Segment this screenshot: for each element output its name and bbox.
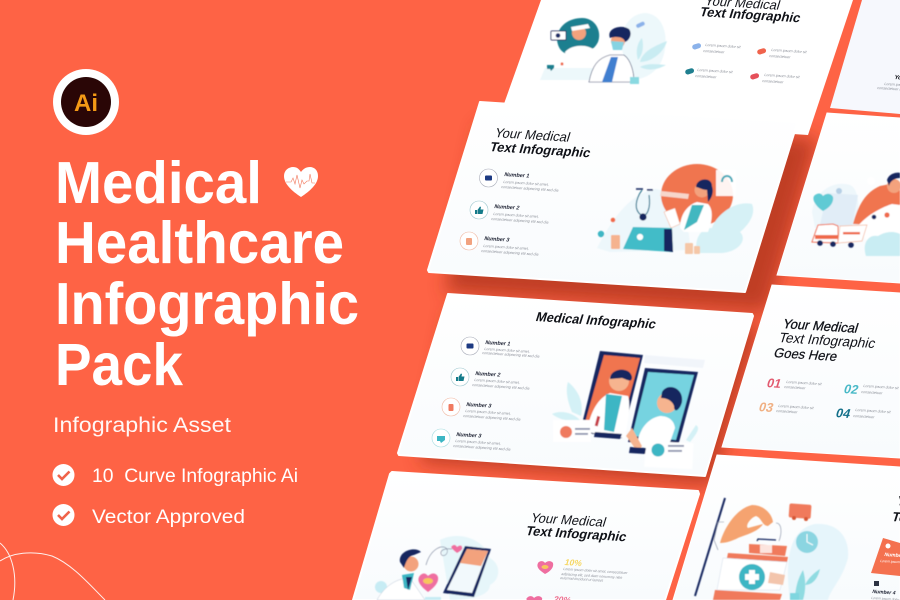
title: Your Medical: [781, 316, 860, 336]
feature: vector approved: [52, 504, 245, 528]
stat 10 percent: [537, 557, 629, 583]
items: four capsule notes: Lorem ipsum dolor sit: [697, 68, 734, 74]
stat 10 percent: adipiscing elit, sed diam nonummy nibh: [561, 572, 623, 580]
panel: far right top slide: [830, 0, 900, 114]
illustration: doctor with heart and phone: [375, 536, 498, 600]
item 3: consectetuer adipiscing elit sed dia: [481, 249, 540, 257]
numbered items: consectetuer: [776, 409, 799, 414]
items: four capsule notes: consectetuer: [695, 74, 718, 79]
numbered items: 04: [834, 405, 853, 421]
item 3: Number 3: [465, 402, 492, 410]
title: [772, 316, 878, 364]
item 3: [460, 232, 540, 257]
numbered items: Lorem ipsum dolor sit: [786, 380, 823, 386]
title: Goes Here: [772, 345, 839, 364]
subtitle: Infographic Asset: [53, 414, 231, 437]
item 3: Number 3: [483, 236, 510, 244]
items: four capsule notes: consectetuer: [703, 49, 726, 54]
numbered items: 01: [765, 375, 784, 391]
items: four capsule notes: consectetuer: [769, 54, 792, 59]
stat 10 percent: Lorem ipsum dolor sit amet, consectetuer: [563, 567, 629, 575]
item 1: consectetuer adipiscing elit sed dia: [501, 185, 560, 193]
numbered items: Lorem ipsum dolor sit: [778, 404, 815, 410]
item 2: Number 2: [474, 371, 501, 379]
item 3: [442, 398, 522, 422]
illustration: hand with pharmacy box: [695, 498, 848, 600]
stat 10 percent: euismod tincidunt ut laoreet: [560, 576, 604, 583]
item 4: Number 3: [455, 432, 482, 440]
title: Text Infographic: [524, 523, 629, 544]
title: your medical text infographic: Text Infographic: [698, 4, 803, 25]
item 2: Lorem ipsum dolor sit amet,: [493, 212, 539, 219]
numbered items: Lorem ipsum dolor sit: [855, 408, 892, 414]
item 1: Lorem ipsum dolor sit amet,: [484, 347, 530, 354]
item 3: consectetuer adipiscing elit sed dia: [463, 414, 522, 422]
title: main heading: Healthcare: [55, 210, 344, 276]
numbered items: consectetuer: [784, 385, 807, 390]
title: main heading: Medical: [55, 150, 262, 216]
item 3: Lorem ipsum dolor sit amet,: [483, 244, 529, 251]
illustration: doctor with stethoscope and calendar: [597, 164, 753, 254]
title: main heading: Infographic: [55, 271, 359, 337]
text fragment and orange box: Number 4: [871, 589, 896, 596]
items: four capsule notes: [685, 43, 808, 84]
panel: top slide: [500, 0, 853, 135]
panel: pharmacy slide: [673, 455, 900, 600]
items: four capsule notes: Lorem ipsum dolor sit: [705, 43, 742, 49]
item 1: [461, 337, 541, 359]
illustration: patient and masked doctor: [540, 13, 667, 84]
item 2: consectetuer adipiscing elit sed dia: [472, 383, 531, 391]
numbered items: 03: [757, 399, 776, 415]
numbered items: 02: [842, 381, 861, 397]
item 4: Lorem ipsum dolor sit amet,: [455, 439, 501, 446]
title: Your Medical: [529, 510, 608, 530]
item 1: Lorem ipsum dolor sit amet,: [503, 180, 549, 187]
item 1: consectetuer adipiscing elit sed dia: [482, 351, 541, 359]
title: Your Medical: [493, 125, 572, 145]
numbered items: consectetuer: [861, 390, 884, 395]
panel: numbered slide: [722, 285, 900, 458]
item 2: Lorem ipsum dolor sit amet,: [474, 378, 520, 385]
items: four capsule notes: Lorem ipsum dolor sit: [764, 73, 801, 79]
title: Text Infographic: [777, 329, 878, 351]
decorative curves: [0, 543, 105, 600]
numbered items: [757, 375, 900, 421]
title: main heading: [55, 150, 359, 398]
title: [524, 510, 629, 544]
panel: medical infographic slide: [398, 294, 753, 476]
item 1: Number 1: [503, 172, 530, 180]
item 2: consectetuer adipiscing elit sed dia: [491, 217, 550, 225]
item 1: [480, 169, 560, 193]
item 3: Lorem ipsum dolor sit amet,: [465, 409, 511, 416]
icon: heart with pulse: [284, 167, 318, 197]
logo: illustrator badge: Ai: [74, 90, 98, 117]
text fragment: [877, 74, 900, 92]
numbered items: Lorem ipsum dolor sit: [863, 384, 900, 390]
title: Text Infographic: [488, 139, 593, 160]
title: [488, 125, 593, 160]
stat 20 percent: [526, 594, 573, 600]
logo: illustrator badge: [53, 69, 119, 135]
stat 10 percent: 10%: [563, 557, 584, 568]
panel: main slide your medical: [428, 102, 797, 292]
text fragment and orange box: Lorem ipsum: [880, 559, 900, 564]
item 4: [432, 429, 512, 452]
feature: vector approved: Vector Approved: [92, 507, 245, 528]
illustration: two phones with doctor and patient: [552, 351, 705, 469]
items: four capsule notes: consectetuer: [762, 79, 785, 84]
item 2: [451, 368, 531, 391]
panel: ambulance slide: [777, 113, 900, 283]
text fragment and orange box: [871, 493, 900, 600]
item 2: Number 2: [493, 204, 520, 212]
illustration: doctor and ambulance: [812, 173, 900, 256]
feature: curve infographic: 10 Curve Infographic Ai: [92, 466, 298, 487]
item 1: Number 1: [484, 340, 511, 348]
title: Medical Infographic: [534, 309, 658, 331]
card shadows: [420, 125, 818, 485]
item 4: consectetuer adipiscing elit sed dia: [453, 444, 512, 452]
panel: percent slide: [353, 472, 699, 600]
title: main heading: Pack: [55, 332, 183, 398]
items: four capsule notes: Lorem ipsum dolor sit: [771, 48, 808, 54]
item 2: [470, 201, 550, 225]
numbered items: consectetuer: [853, 414, 876, 419]
